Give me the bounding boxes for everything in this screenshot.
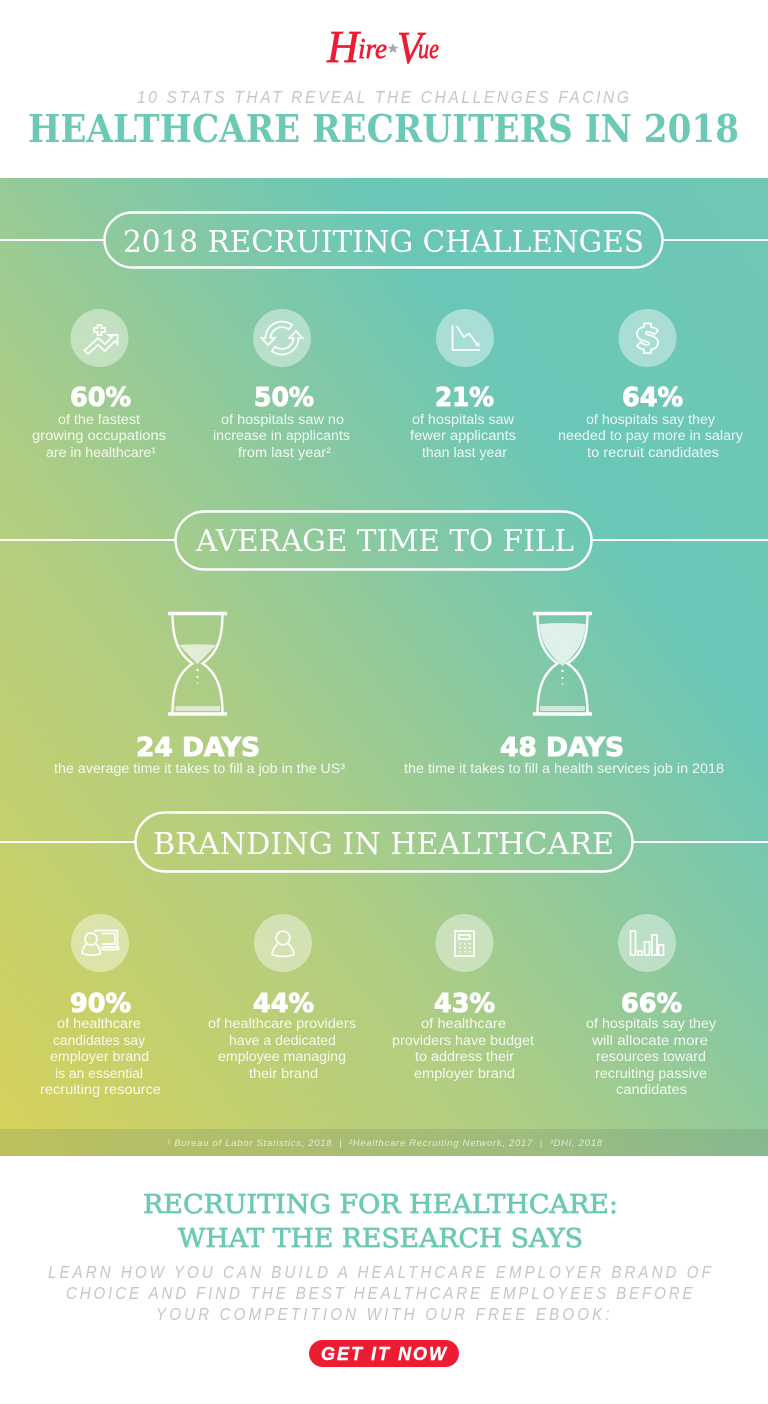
footnote band: ¹ Bureau of Labor Statistics, 2018 | ²Healthcare Recruiting Network, 2017 | ³DHI, 2018 [167,1138,603,1149]
stat: 64% salary [558,309,743,460]
stat: 21% fewer applicants: than last year [422,445,508,460]
stat: 90% employer brand: employer brand [50,1049,149,1064]
stat: 60% occupations: of the fastest [58,412,140,427]
heading: what the research says: WHAT THE RESEARCH SAYS [178,1224,583,1254]
stat: 50% applicants: increase in applicants [213,428,350,443]
stat: 44% dedicated employee [208,914,356,1081]
stat: 66% passive candidates: recruiting passive [595,1066,707,1081]
section heading: branding in healthcare [0,812,768,872]
logo: HireVue: V [397,22,426,73]
stat: 43% budget: employer brand [414,1066,515,1081]
heading: what the research says: RECRUITING FOR HEALTHCARE: [143,1190,618,1220]
button: get it now [309,1340,459,1367]
stat: 48 days: the time it takes to fill a health services job in 2018 [404,761,724,776]
stat: 50% applicants [213,309,350,460]
stat: 44% dedicated employee: employee managing [218,1049,346,1064]
stat: 21% fewer applicants: 21% [435,383,494,413]
icon: bar chart [618,914,676,972]
stat: 66% passive candidates: 66% [621,989,682,1019]
icon: calculator [436,914,494,972]
text block: ebook pitch [48,1262,712,1324]
stat: 21% fewer applicants: of hospitals saw [412,412,514,427]
stat: 60% occupations: are in healthcare¹ [46,445,157,460]
logo: HireVue [326,21,439,73]
icon: declining chart [436,309,494,367]
stat: 66% passive candidates: of hospitals say they [586,1016,716,1031]
stat: 24 days: 24 DAYS [136,733,260,763]
subtitle: 10 STATS THAT REVEAL THE CHALLENGES FACING [137,87,629,107]
stat: 60% occupations [32,309,166,460]
stat: 24 days [54,614,346,776]
section heading: average time to fill: AVERAGE TIME TO FILL [195,524,574,559]
icon: hourglass nearly full [533,614,592,714]
logo: HireVue: ire [358,33,387,65]
stat: 43% budget: providers have budget [392,1033,534,1048]
stat: 43% budget: to address their [415,1049,515,1064]
stat: 21% fewer applicants [410,309,516,460]
section heading: average time to fill [0,512,768,570]
stat: 64% salary: 64% [622,383,683,413]
stat: 43% budget [392,914,534,1081]
logo: HireVue: H [326,21,362,72]
stat: 48 days: 48 DAYS [500,733,624,763]
stat: 90% employer brand: candidates say [53,1033,145,1048]
section heading: branding in healthcare: BRANDING IN HEALTHCARE [153,827,614,862]
section heading: 2018 recruiting challenges: 2018 RECRUITING CHALLENGES [123,225,644,260]
footnote band [0,1129,768,1156]
stat: 43% budget: of healthcare [421,1016,506,1031]
stat: 44% dedicated employee: have a dedicated [229,1033,336,1048]
stat: 48 days [404,614,724,776]
text block: ebook pitch: LEARN HOW YOU CAN BUILD A HEALTHCARE EMPLOYER BRAND OF [48,1262,712,1282]
stat: 43% budget: 43% [434,989,495,1019]
heading: what the research says [143,1190,618,1254]
stat: 66% passive candidates [586,914,716,1097]
stat: 90% employer brand: is an essential [55,1066,143,1081]
stat: 64% salary: of hospitals say they [586,412,715,427]
panel: gradient background [0,178,768,1156]
button: get it now: GET IT NOW [321,1344,448,1364]
text block: ebook pitch: YOUR COMPETITION WITH OUR FREE EBOOK: [156,1304,610,1324]
stat: 44% dedicated employee: their brand [249,1066,318,1081]
stat: 90% employer brand [40,914,161,1097]
stat: 64% salary: needed to pay more in salary [558,428,743,443]
stat: 90% employer brand: 90% [70,989,131,1019]
icon: dollar sign [618,309,676,367]
stat: 24 days: the average time it takes to fill a job in the US³ [54,761,346,776]
stat: 64% salary: to recruit candidates [587,445,719,460]
stat: 44% dedicated employee: of healthcare providers [208,1016,356,1031]
stat: 50% applicants: 50% [254,383,314,413]
icon: refresh arrows [253,309,311,367]
icon: person [254,914,312,972]
icon: hourglass nearly empty [168,614,227,714]
logo: HireVue: ue [418,33,439,65]
stat: 44% dedicated employee: 44% [253,989,314,1019]
stat: 60% occupations: growing occupations [32,428,166,443]
icon: person at computer [71,914,129,972]
stat: 50% applicants: of hospitals saw no [221,412,344,427]
stat: 66% passive candidates: candidates [616,1082,687,1097]
section heading: 2018 recruiting challenges [0,212,768,268]
stat: 90% employer brand: of healthcare [57,1016,141,1031]
stat: 66% passive candidates: will allocate more [591,1033,708,1048]
stat: 50% applicants: from last year² [238,445,332,460]
stat: 66% passive candidates: resources toward [596,1049,706,1064]
icon: growth arrow with plus [70,309,128,367]
stat: 21% fewer applicants: fewer applicants [410,428,516,443]
stat: 90% employer brand: recruiting resource [40,1082,161,1097]
text block: ebook pitch: CHOICE AND FIND THE BEST HEALTHCARE EMPLOYEES BEFORE [66,1283,693,1303]
stat: 60% occupations: 60% [70,383,131,413]
